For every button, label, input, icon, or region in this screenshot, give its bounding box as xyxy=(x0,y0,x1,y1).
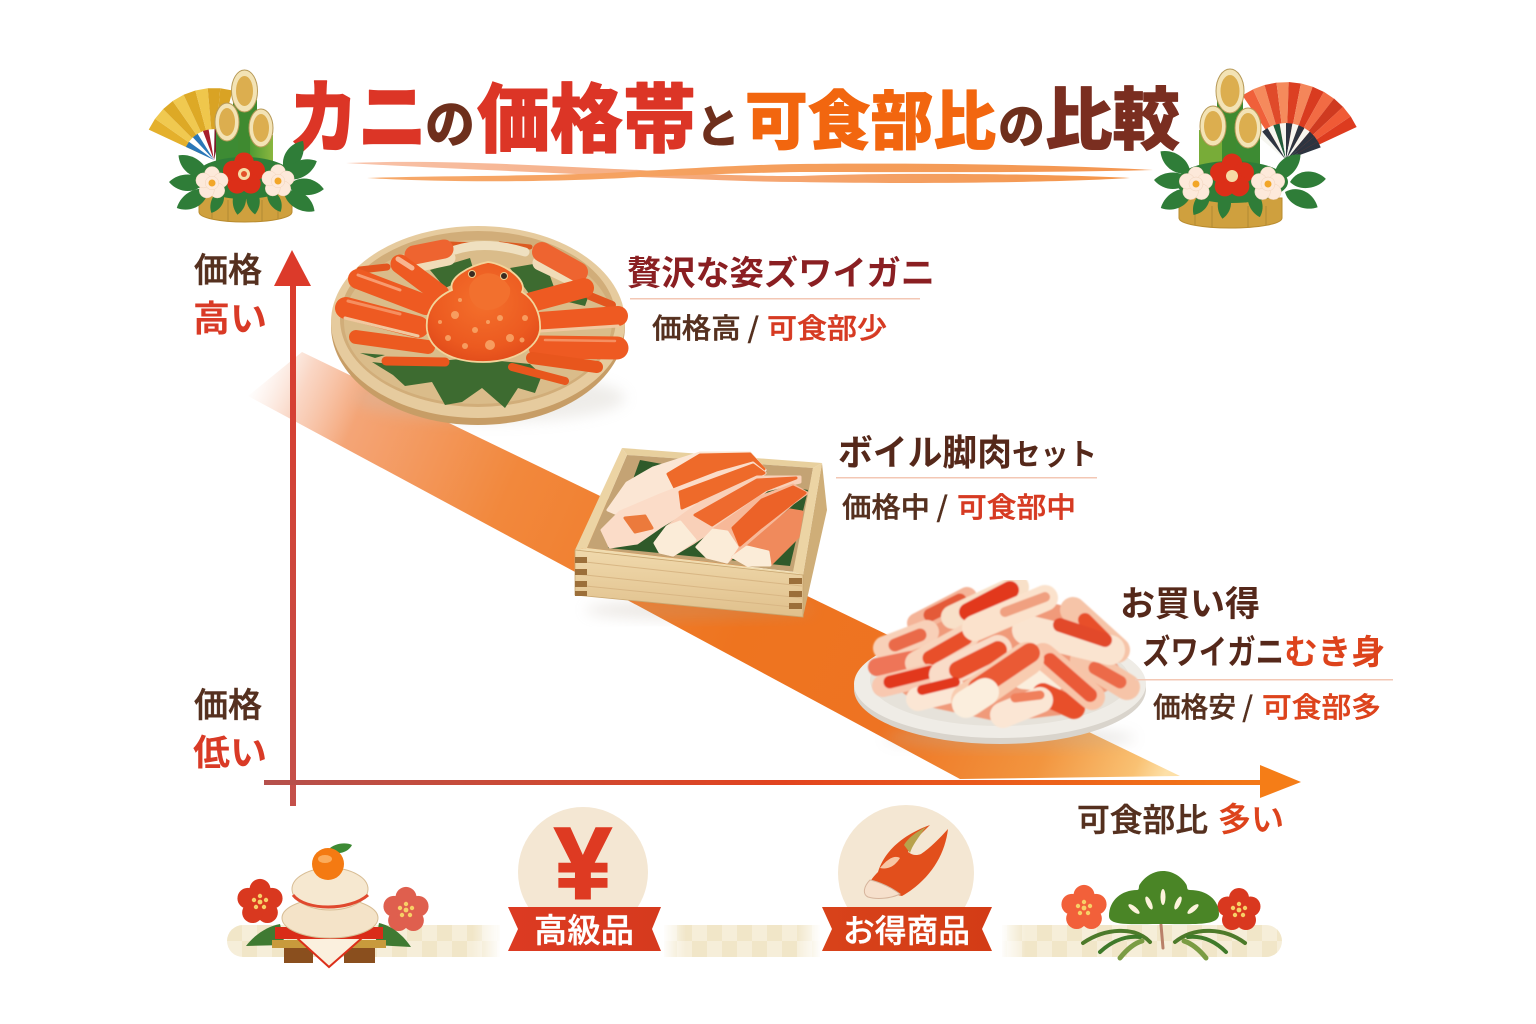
label: luxury whole snow crab: 可食部少 xyxy=(767,307,887,347)
label: luxury whole snow crab: 贅沢な姿ズワイガニ xyxy=(627,246,935,295)
icon: masu box xyxy=(575,448,827,617)
axis label: low price: 低い xyxy=(193,724,267,776)
label: great value picked snow crab: むき身 xyxy=(1284,625,1385,674)
icon: mandarin orange xyxy=(312,843,352,880)
icon: basket xyxy=(1179,198,1282,228)
icon: wooden plate xyxy=(331,226,625,425)
icon: bamboo stalks xyxy=(1199,69,1261,172)
icon: white plate xyxy=(854,630,1146,744)
icon: crab claw coin xyxy=(838,805,974,941)
title xyxy=(289,54,1180,170)
icon: leaves xyxy=(246,923,411,947)
label: boiled leg meat set: セット xyxy=(1012,430,1097,474)
badge: luxury item: 高級品 xyxy=(534,904,634,952)
axis label: edible ratio high xyxy=(1077,793,1284,841)
title brush underline xyxy=(346,162,1153,183)
badge: value item: お得商品 xyxy=(843,906,970,952)
icon: green leaves under crab xyxy=(360,258,590,408)
icon: red fan xyxy=(1242,81,1357,166)
icon: kagami mochi xyxy=(237,843,429,967)
icon: rice cakes xyxy=(282,868,378,938)
checkered strip xyxy=(227,924,1282,958)
title: の xyxy=(998,87,1045,157)
title: 価格帯 xyxy=(477,59,696,168)
kadomatsu right xyxy=(1154,69,1357,228)
panel: picked crab meat on plate xyxy=(854,587,1146,748)
horizontal edible ratio axis arrow xyxy=(264,765,1301,798)
icon: pine needles xyxy=(1083,925,1245,958)
icon: pine leaves xyxy=(1154,145,1327,219)
panel: whole snow crab on wooden plate xyxy=(331,226,625,425)
icon: pine with plum blossoms xyxy=(1061,871,1260,958)
label: boiled leg meat set: 可食部中 xyxy=(957,486,1076,526)
label: great value picked snow crab: お買い得 xyxy=(1120,576,1260,627)
icon: crab leg meat xyxy=(602,453,807,565)
label: great value picked snow crab: ズワイガニ xyxy=(1142,625,1284,674)
icon: pine leaves xyxy=(169,136,325,217)
icon: crab legs xyxy=(345,244,618,381)
label: luxury whole snow crab: 価格高 / xyxy=(652,307,759,347)
title: 可食部比 xyxy=(745,71,996,163)
title: カニ xyxy=(289,54,427,170)
icon: crab shell xyxy=(427,262,540,362)
axis label: high price xyxy=(193,243,267,342)
axis label: high price: 高い xyxy=(193,290,267,342)
title: の xyxy=(425,83,475,158)
panel: boiled leg meat in wooden box xyxy=(575,448,827,619)
diagonal price band xyxy=(248,352,1180,779)
icon: pine canopy xyxy=(1109,871,1219,924)
label: great value picked snow crab xyxy=(1120,576,1393,726)
icon: box front face xyxy=(575,550,803,617)
label: boiled leg meat set: ボイル脚肉 xyxy=(838,424,1012,476)
icon: crab meat pile xyxy=(877,587,1128,722)
icon: base stand xyxy=(272,927,386,967)
title: と xyxy=(696,91,740,157)
icon: red and white blossoms xyxy=(196,152,294,198)
icon: bamboo stalks xyxy=(215,70,273,172)
label: great value picked snow crab: 価格安 / xyxy=(1153,686,1253,726)
badge: luxury item xyxy=(508,904,661,952)
icon: gold fan xyxy=(149,87,233,160)
icon: red and white blossoms xyxy=(1179,154,1285,200)
axis label: edible ratio high: 多い xyxy=(1218,793,1284,841)
icon: yen coin xyxy=(518,807,648,937)
label: boiled leg meat set: 価格中 / xyxy=(842,486,948,526)
axis label: low price: 価格 xyxy=(194,678,262,727)
axis label: low price xyxy=(193,678,267,776)
icon: plum blossoms xyxy=(237,879,429,931)
label: great value picked snow crab: 可食部多 xyxy=(1262,686,1381,726)
axis label: high price: 価格 xyxy=(194,243,262,292)
vertical price axis arrow xyxy=(274,250,311,806)
icon: yen coin: ¥ xyxy=(555,808,611,920)
icon: plum blossoms xyxy=(1061,885,1260,930)
axis label: edible ratio high: 可食部比 xyxy=(1077,795,1208,841)
kadomatsu left xyxy=(149,70,325,222)
label: boiled leg meat set xyxy=(836,424,1097,526)
icon: basket xyxy=(199,192,292,222)
label: luxury whole snow crab xyxy=(627,246,935,347)
title: 比較 xyxy=(1045,65,1180,164)
